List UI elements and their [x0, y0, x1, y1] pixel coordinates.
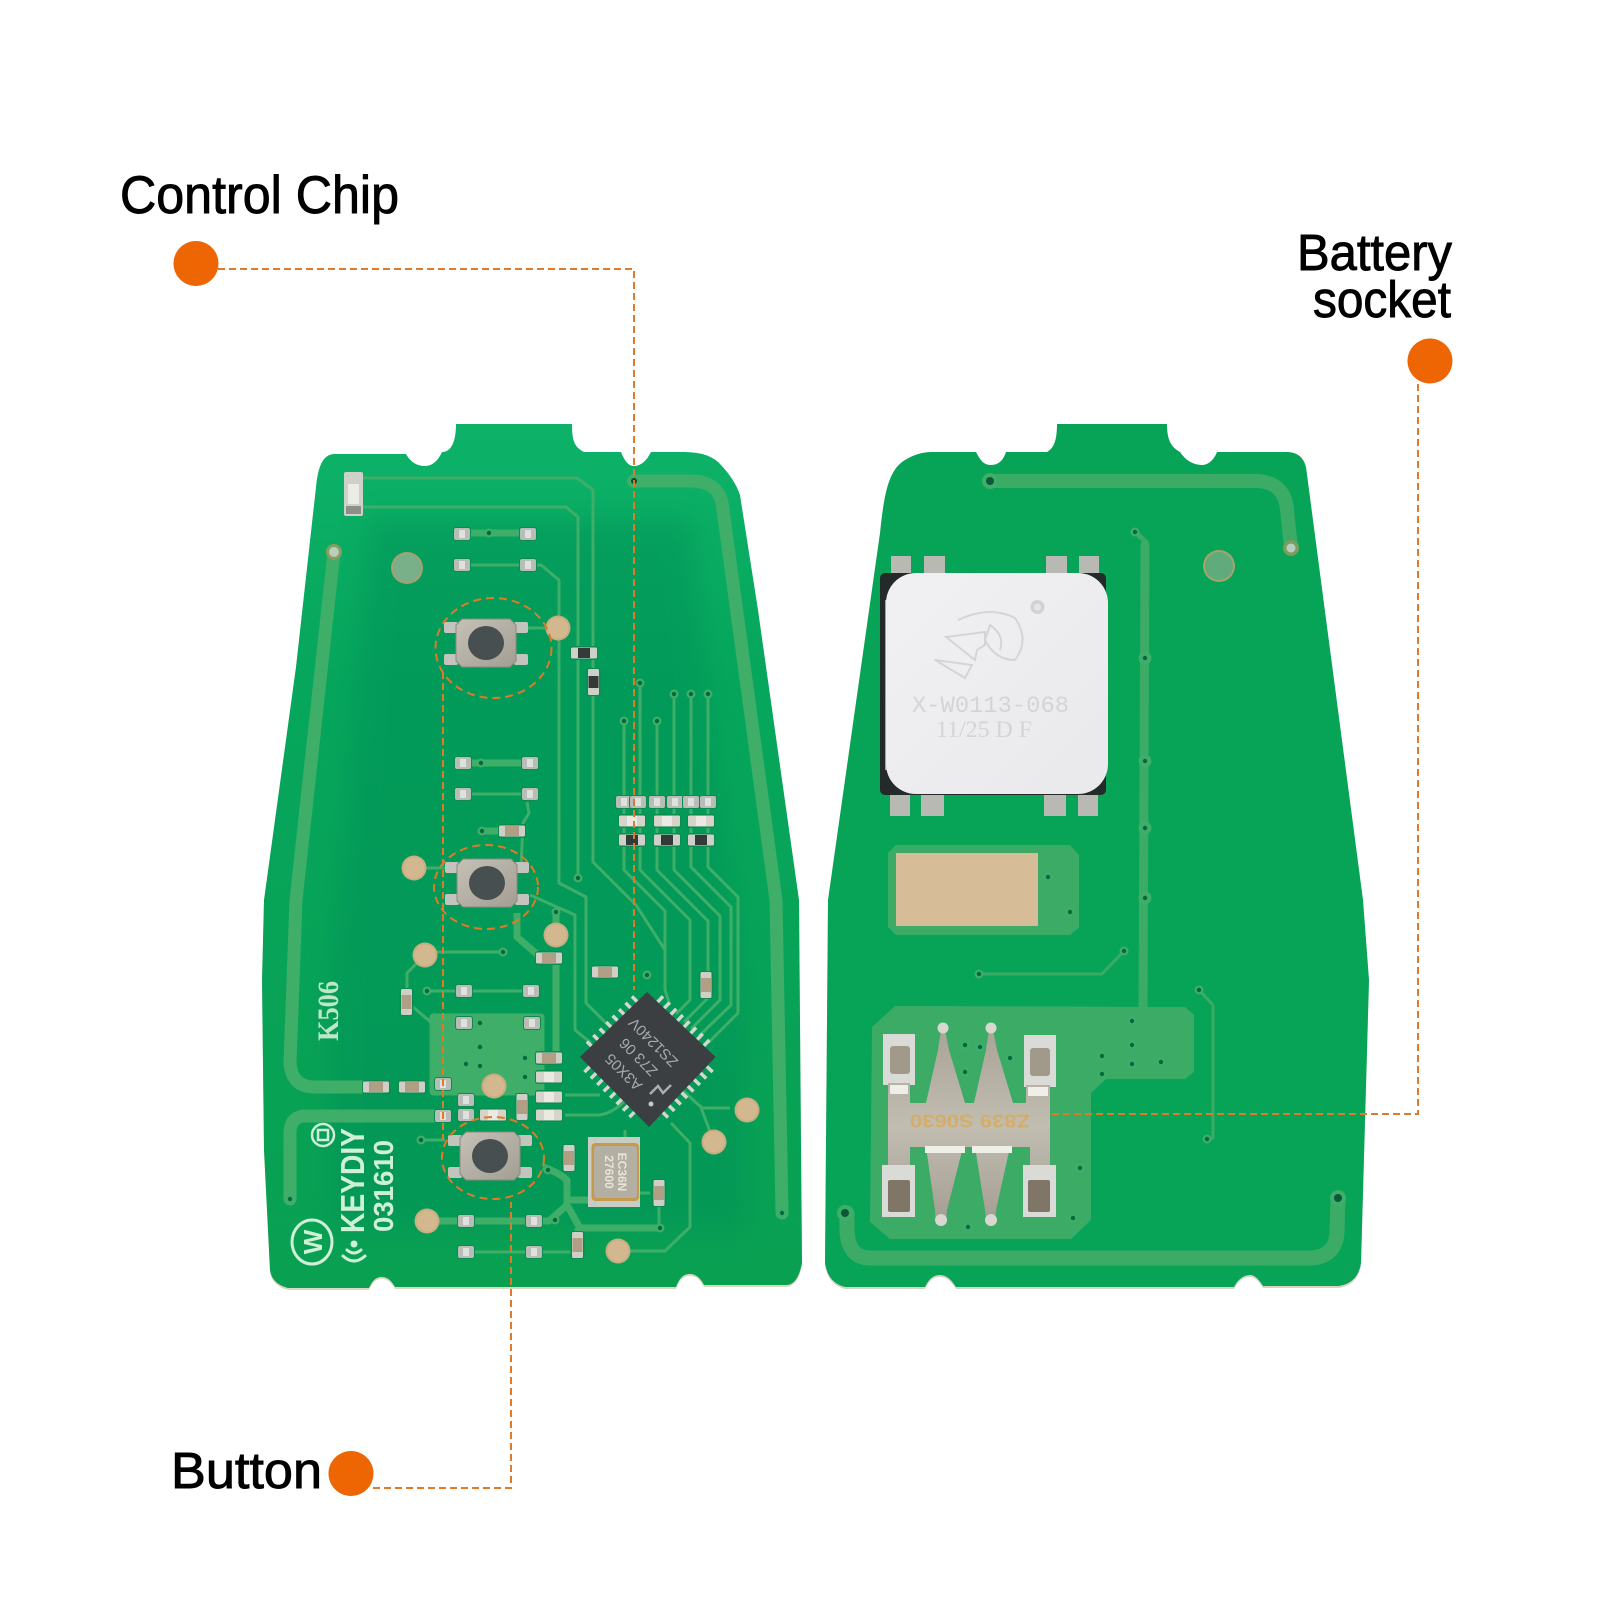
inductor coil module: 11/25 D F [936, 717, 1032, 742]
marker dot [1408, 338, 1452, 384]
signal traces [979, 532, 1213, 1139]
control chip [580, 992, 716, 1127]
silkscreen text K506: K506 [312, 981, 345, 1041]
leader line [218, 269, 634, 990]
pad copper pour [888, 845, 1079, 935]
inductor coil module [880, 556, 1108, 816]
battery socket clip [882, 1022, 1056, 1226]
battery socket clip: Z839 S0630 [910, 1110, 1030, 1130]
silkscreen text KEYDIY: KEYDIY [334, 1128, 371, 1233]
marker dot [174, 241, 218, 286]
vias [286, 474, 786, 1232]
leader line [1050, 384, 1418, 1114]
heading: Battery socket: Battery [1297, 224, 1452, 281]
W logo: W [298, 1229, 328, 1254]
panel: left circuit board [262, 424, 802, 1290]
mounting hole [391, 552, 423, 584]
leader lines and button rings [373, 598, 552, 1488]
W logo [292, 1220, 332, 1264]
darker solder mask area [330, 520, 745, 1230]
silkscreen text 031610: 031610 [368, 1140, 399, 1232]
antenna traces [847, 481, 1338, 1258]
heading: Control Chip: Control Chip [120, 166, 399, 225]
crystal oscillator [588, 1137, 640, 1207]
board outline [262, 424, 802, 1290]
tan contact strip [896, 853, 1038, 926]
inductor coil module: X-W0113-068 [912, 693, 1069, 719]
thick traces and copper pour [427, 533, 658, 1240]
wireless icon [343, 1242, 365, 1261]
control chip: Z73 06 [616, 1034, 661, 1079]
control chip: A3X05 [602, 1050, 646, 1094]
battery copper pour [870, 1006, 1194, 1239]
vias and mounting hole [837, 473, 1346, 1232]
crystal oscillator: EC36N [615, 1153, 629, 1191]
callout: control chip [120, 166, 634, 990]
heading: Battery socket: socket [1313, 271, 1451, 328]
solder pads and small components [362, 527, 717, 1259]
tactile switches [444, 619, 532, 1180]
tan contact pads [402, 616, 760, 1264]
antenna traces [290, 481, 782, 1213]
panel: right circuit board [825, 424, 1369, 1289]
callout: button [171, 598, 552, 1499]
heading: Battery socket [1297, 224, 1452, 328]
signal traces [363, 478, 738, 1252]
control chip: ZS1240V [626, 1014, 682, 1070]
crystal oscillator: 27600 [602, 1155, 616, 1189]
heading: Button: Button [171, 1442, 322, 1499]
LED component [344, 472, 363, 516]
registered mark [312, 1124, 334, 1146]
callout: battery socket [1050, 224, 1452, 1114]
board outline [825, 424, 1369, 1289]
marker dot [328, 1451, 374, 1496]
